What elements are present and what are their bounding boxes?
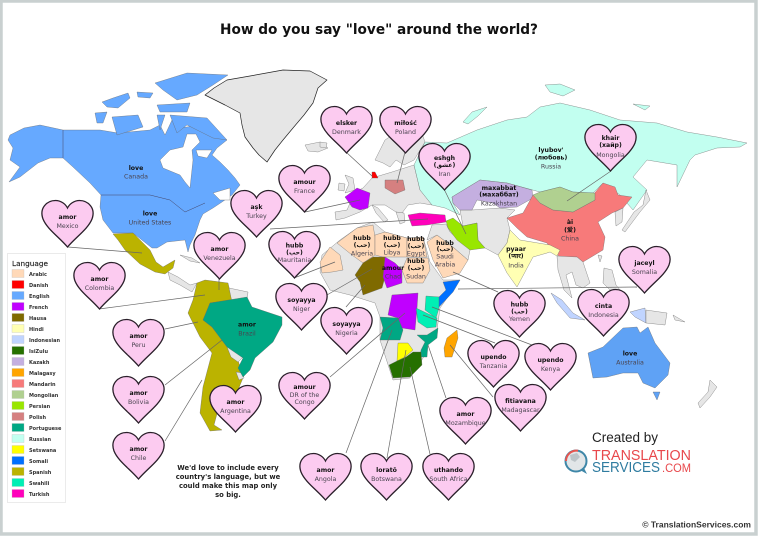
on-map label: Brazil: Brazil <box>238 330 256 338</box>
on-map label: Canada: love <box>129 165 143 172</box>
on-map label: Saudi Arabia: (حب) <box>437 246 454 253</box>
Mexico <box>113 233 175 274</box>
note text: We'd love to include every <box>177 464 279 472</box>
heart: Mexico: Mexico <box>56 223 79 230</box>
on-map label: United States <box>129 210 171 226</box>
heart: Colombia: Colombia <box>85 285 114 292</box>
heart: Yemen: hubb <box>511 302 529 308</box>
heart: Bolivia: Bolivia <box>128 399 149 406</box>
heart: Tanzania: Tanzania <box>479 363 507 370</box>
on-map label: Australia: Australia <box>616 360 644 366</box>
heart: Poland <box>380 106 431 153</box>
heart: DR of the Congo: DR of the <box>290 392 319 399</box>
Central America and Caribbean <box>168 272 197 292</box>
heart: Mongolia: khair <box>602 135 620 142</box>
heart: Kenya: Kenya <box>541 366 560 373</box>
heart: Mozambique: amor <box>457 411 475 418</box>
legend: Mongolian <box>29 393 59 399</box>
heart: Mauritania: (حب) <box>286 250 303 256</box>
Canada and United States <box>8 73 240 252</box>
heart: Yemen: (حب) <box>511 308 528 316</box>
note text: could make this map only <box>179 482 278 490</box>
legend: Swahili <box>29 481 50 487</box>
on-map label: China <box>561 218 579 242</box>
legend: Mandarin <box>29 382 56 388</box>
on-map label: Russia: Russia <box>541 164 561 170</box>
legend: French <box>29 305 48 311</box>
legend: Somali <box>29 459 48 465</box>
on-map label: Saudi Arabia: hubb <box>436 240 454 247</box>
heart: Angola <box>300 454 351 500</box>
Africa base <box>320 222 460 380</box>
on-map label: Algeria: Algeria <box>351 250 373 258</box>
on-map label: Saudi Arabia: Arabia <box>435 262 455 268</box>
on-map label: Libya: hubb <box>383 235 401 242</box>
Hausa <box>355 257 385 295</box>
heart: Nigeria <box>321 308 372 354</box>
heart: Niger: soyayya <box>287 297 316 304</box>
legend: Polish <box>29 415 47 421</box>
heart: Poland: Poland <box>395 129 416 136</box>
legend: Russian <box>29 437 51 443</box>
legend: Portuguese <box>29 426 62 432</box>
on-map label: China: China <box>561 236 579 242</box>
France <box>345 188 370 210</box>
on-map label: Egypt: (حب) <box>408 243 425 250</box>
logo globe icon <box>566 450 587 474</box>
heart: Mozambique <box>440 398 491 444</box>
legend: Hindi <box>29 327 44 333</box>
Created by logo: SERVICES <box>592 460 660 476</box>
heart: Niger: Niger <box>293 306 310 313</box>
on-map label: Chad: Chad <box>385 274 401 280</box>
logo wordmark: TRANSLATION <box>592 448 691 464</box>
legend: Hausa <box>29 316 46 322</box>
heart: Iran: (عشق) <box>434 162 456 169</box>
heart: Denmark: Denmark <box>332 129 361 136</box>
Papua New Guinea <box>646 310 667 325</box>
heart: Yemen: Yemen <box>508 316 530 323</box>
legend: Language <box>12 259 49 268</box>
heart: Tanzania: upendo <box>480 354 507 361</box>
leader lines <box>68 152 637 458</box>
Europe base <box>335 165 432 220</box>
Poland <box>385 180 405 194</box>
heart: Iran: eshgh <box>434 155 455 162</box>
Arabic speaking countries <box>320 225 468 283</box>
heart: DR of the Congo: amour <box>293 384 317 391</box>
on-map label: Algeria <box>351 235 373 258</box>
copyright: © TranslationServices.com <box>642 520 751 530</box>
heart: France: amour <box>293 179 317 186</box>
heart: Indonesia: cinta <box>595 303 612 310</box>
heart: Argentina <box>210 386 261 432</box>
on-map label: Egypt: hubb <box>407 236 425 243</box>
on-map label: Libya: (حب) <box>384 242 401 249</box>
on-map label: Algeria: hubb <box>353 235 371 242</box>
legend: Indonesian <box>29 338 60 344</box>
legend: Persian <box>29 404 51 410</box>
New Zealand <box>698 380 717 408</box>
legend: Spanish <box>29 470 52 476</box>
heart: Mongolia: Mongolia <box>596 152 625 159</box>
heart: Mauritania <box>269 232 320 278</box>
heart: Mauritania: hubb <box>286 242 304 250</box>
on-map label: India <box>506 246 527 270</box>
legend: IsiZulu <box>29 349 48 355</box>
Brazil <box>203 297 282 377</box>
Created by logo: .COM <box>662 463 691 475</box>
Denmark <box>372 172 378 178</box>
heart: South Africa: uthando <box>434 467 463 474</box>
heart: France: France <box>294 188 315 195</box>
on-map label: Libya: Libya <box>384 250 401 256</box>
heart: Iran: Iran <box>438 171 451 178</box>
legend: Danish <box>29 283 49 289</box>
heart: Mozambique: Mozambique <box>445 420 486 427</box>
legend: Turkish <box>29 492 50 498</box>
heart: Kenya: upendo <box>537 357 564 364</box>
French: Chad, DR Congo <box>383 257 402 288</box>
heart: Denmark: elsker <box>336 120 358 127</box>
South East Asia, Korea, Japan, Philippines <box>557 256 590 298</box>
Turkey <box>408 213 446 226</box>
heart: Somalia: jaceyl <box>633 260 655 267</box>
Mongolia <box>533 187 595 212</box>
on-map label: Russia <box>535 147 567 170</box>
Middle East and Central Asia base <box>460 208 515 255</box>
heart: Colombia: amor <box>91 276 109 283</box>
heart: Nigeria: Nigeria <box>335 330 358 337</box>
heart: Denmark <box>321 106 372 153</box>
heart: Colombia <box>74 262 125 309</box>
heart: Niger <box>276 284 327 330</box>
legend: English <box>29 294 50 300</box>
on-map label: India: India <box>508 262 524 270</box>
on-map label: Egypt: Egypt <box>407 250 426 258</box>
heart: Madagascar: Madagascar <box>501 407 540 414</box>
legend: Malagasy <box>29 371 56 377</box>
heart: Turkey <box>231 190 282 237</box>
Somalia <box>439 280 460 307</box>
on-map label: Egypt <box>407 236 426 258</box>
title: How do you say "love" around the world? <box>220 22 538 38</box>
heart: Botswana <box>361 454 412 500</box>
note text: country's language, but we <box>176 473 281 481</box>
world map <box>8 70 747 431</box>
heart: Madagascar <box>495 384 546 431</box>
on-map label: China: (爱) <box>564 226 576 234</box>
on-map label: Sudan: hubb <box>407 258 425 265</box>
on-map label: Algeria: (حب) <box>354 242 371 249</box>
note text: so big. <box>215 491 241 499</box>
heart: Madagascar: fitiavana <box>505 398 536 405</box>
on-map label: Brazil <box>238 322 257 338</box>
on-map label: China: ài <box>567 218 573 226</box>
Created by logo <box>566 430 691 476</box>
on-map label: Sudan <box>406 258 426 280</box>
Swahili <box>416 308 437 328</box>
heart: Indonesia: Indonesia <box>588 312 619 319</box>
heart: Angola: Angola <box>315 476 337 483</box>
heart: Turkey: aşk <box>251 204 263 211</box>
on-map label: India: (प्यार) <box>508 253 524 260</box>
on-map label: United States: love <box>143 210 157 218</box>
Iran <box>446 218 485 250</box>
Kazakhstan <box>452 180 533 210</box>
heart: Chile: Chile <box>131 455 147 462</box>
heart: Bolivia <box>113 376 164 423</box>
on-map label: Australia <box>616 350 644 366</box>
note text <box>176 464 281 499</box>
heart: South Africa: South Africa <box>429 476 468 483</box>
Guyanas, Paraguay, Uruguay <box>229 288 248 302</box>
on-map label: Sudan: Sudan <box>406 274 426 280</box>
Australia <box>588 327 670 388</box>
legend: Setswana <box>29 448 56 454</box>
on-map label: Saudi Arabia: Saudi <box>436 254 454 260</box>
heart: Chile: amor <box>130 446 148 453</box>
heart: Peru: amor <box>130 333 148 340</box>
legend: Kazakh <box>29 360 50 366</box>
heart: Kenya <box>525 344 576 390</box>
South America Spanish <box>188 280 243 431</box>
heart: Turkey: Turkey <box>245 213 267 220</box>
legend <box>8 254 66 502</box>
on-map label: Russia: lyubov' <box>538 147 564 154</box>
heart: Bolivia: amor <box>130 390 148 397</box>
on-map label: Brazil: amor <box>238 322 257 328</box>
India <box>498 230 560 287</box>
on-map label: Kazakhstan: Kazakhstan <box>481 200 517 208</box>
heart: DR of the Congo <box>279 372 330 419</box>
heart: Argentina: Argentina <box>220 408 251 415</box>
on-map label: Chad: amour <box>382 265 405 272</box>
Greenland <box>205 70 327 162</box>
South Africa <box>389 352 422 378</box>
on-map label: United States: United States <box>129 220 171 226</box>
on-map label: Russia: (любовь) <box>535 154 567 162</box>
heart: DR of the Congo: Congo <box>294 399 315 406</box>
heart: Mongolia: (хайр) <box>599 141 622 149</box>
on-map label: Canada: Canada <box>124 174 148 180</box>
on-map label: Chad <box>382 265 405 280</box>
heart: France <box>279 166 330 212</box>
heart: Somalia: Somalia <box>632 269 657 276</box>
Botswana <box>397 343 413 361</box>
heart: Mexico: amor <box>59 214 77 221</box>
on-map label: Kazakhstan: maxabbat <box>482 185 516 192</box>
heart: South Africa <box>423 454 474 500</box>
heart: Argentina: amor <box>227 399 245 406</box>
on-map label: India: pyaar <box>506 246 527 253</box>
heart: Somalia <box>619 246 670 293</box>
created by text: Created by <box>592 430 658 445</box>
heart: Iran <box>419 144 470 190</box>
heart: Tanzania <box>468 340 519 387</box>
heart: Venezuela: amor <box>211 246 229 253</box>
heart: Venezuela: Venezuela <box>203 255 236 262</box>
on-map label: Kazakhstan <box>479 185 519 208</box>
Hudson Bay <box>160 134 200 188</box>
heart: Peru <box>113 320 164 366</box>
heart: Chile <box>113 432 164 479</box>
heart: Venezuela <box>194 232 245 279</box>
heart: Indonesia <box>578 290 629 336</box>
Russia <box>414 103 747 215</box>
on-map label: Kazakhstan: (махаббат) <box>479 190 519 198</box>
on-map label: Libya <box>383 235 401 256</box>
heart: Peru: Peru <box>131 342 146 349</box>
heart: Angola: amor <box>317 467 335 474</box>
Portuguese: Angola, Mozambique <box>380 317 403 340</box>
on-map label: Canada <box>124 165 148 180</box>
Borders of Canada and Alaska <box>62 130 64 158</box>
heart: Nigeria: soyayya <box>332 321 361 328</box>
heart: Mongolia <box>585 124 636 171</box>
Indonesia <box>551 293 585 320</box>
on-map label: Australia: love <box>623 350 637 358</box>
heart: Poland: miłość <box>394 119 417 127</box>
legend: Arabic <box>29 272 47 278</box>
heart: Mexico <box>42 200 93 247</box>
on-map label: Saudi Arabia <box>435 240 455 268</box>
Madagascar <box>444 330 458 357</box>
heart: Mauritania: Mauritania <box>278 257 311 264</box>
heart: Botswana: Botswana <box>371 476 402 483</box>
heart: Yemen <box>494 290 545 337</box>
heart: Botswana: loratô <box>376 466 397 474</box>
on-map label: Sudan: (حب) <box>408 265 425 272</box>
China <box>507 183 632 262</box>
